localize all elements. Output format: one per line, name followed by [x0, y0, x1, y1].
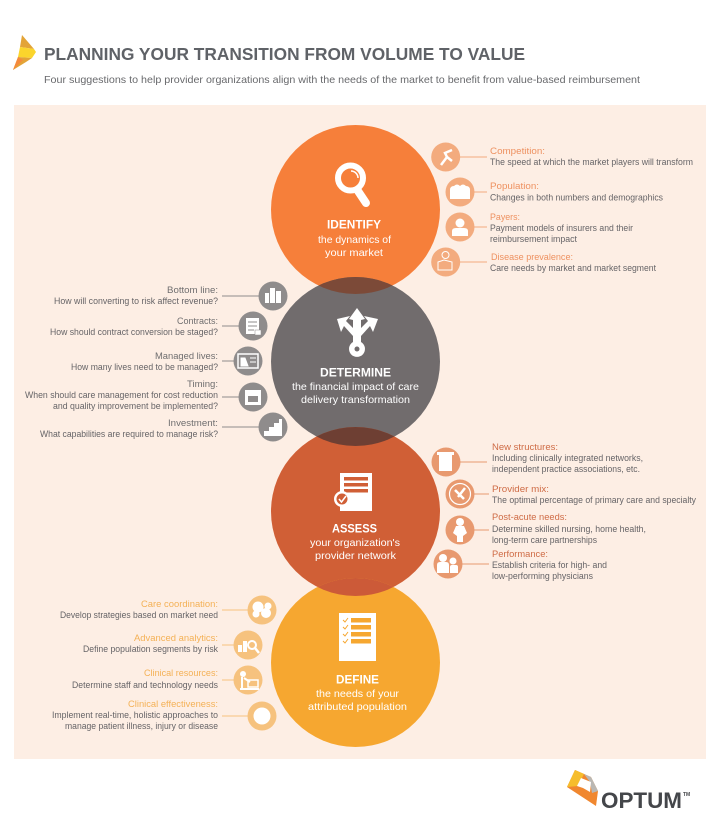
circle: determine — [271, 277, 440, 446]
text: define description — [308, 689, 407, 713]
item: care coordination — [60, 596, 276, 624]
item: payers: reimbursement impact — [490, 234, 578, 244]
item: provider mix: The optimal percentage of primary care and specialty — [492, 495, 697, 505]
item: timing: When should care management for cost reduction — [25, 390, 218, 400]
item: advanced analytics — [83, 630, 262, 660]
item: managed lives — [71, 346, 262, 376]
logo: optum — [567, 770, 690, 813]
item: clinical resources: Clinical resources: — [144, 668, 218, 678]
item: performance — [434, 549, 607, 581]
item: timing: Timing: — [187, 379, 218, 389]
item: population — [446, 178, 664, 206]
circle: assess — [271, 427, 440, 596]
item: clinical effectiveness: Clinical effectiveness: — [128, 699, 218, 709]
text: determine description: delivery transformation — [301, 395, 410, 406]
item: managed lives: Managed lives: — [155, 351, 218, 361]
item: provider mix: Provider mix: — [492, 484, 549, 494]
item: contracts: Contracts: — [177, 316, 218, 326]
item: timing — [25, 379, 268, 412]
text: identify description — [318, 235, 391, 259]
overlap: assess and define — [318, 578, 393, 596]
heading: assess: ASSESS — [332, 522, 377, 536]
text: identify description: your market — [325, 248, 383, 259]
item: investment: What capabilities are required to manage risk? — [40, 429, 218, 439]
item: provider mix — [446, 480, 697, 508]
item: bottom line: How will converting to risk affect revenue? — [54, 296, 218, 306]
item: investment — [40, 412, 288, 442]
item: advanced analytics: Define population segments by risk — [83, 644, 219, 654]
brand mark: top left — [13, 35, 36, 70]
icon: checklist — [339, 613, 376, 661]
item: competition: The speed at which the market players will transform — [490, 157, 693, 167]
item: clinical effectiveness: manage patient illness, injury or disease — [65, 721, 218, 731]
item: payers: Payers: — [490, 212, 520, 222]
item: clinical effectiveness — [52, 699, 276, 731]
item: performance: Performance: — [492, 549, 548, 559]
item: investment: Investment: — [168, 418, 218, 428]
item: new structures: Including clinically integrated networks, — [492, 453, 643, 463]
text: assess description: your organization's — [310, 538, 400, 549]
heading: define: DEFINE — [336, 672, 379, 686]
item: disease prevalence: Disease prevalence: — [491, 252, 573, 262]
item: clinical resources — [72, 666, 262, 694]
item: post-acute needs: long-term care partnerships — [492, 535, 598, 545]
item: clinical effectiveness: Implement real-time, holistic approaches to — [52, 710, 218, 720]
item: clinical resources: Determine staff and technology needs — [72, 680, 219, 690]
item: disease prevalence: Care needs by market and market segment — [490, 263, 657, 273]
overlap: determine and assess — [316, 427, 394, 446]
item: new structures: New structures: — [492, 442, 558, 452]
text: determine description — [292, 382, 419, 406]
item: timing: and quality improvement be implemented? — [53, 401, 218, 411]
item: new structures — [432, 442, 643, 476]
item: advanced analytics: Advanced analytics: — [134, 633, 218, 643]
text: identify description: the dynamics of — [318, 235, 391, 246]
text: define description: the needs of your — [316, 689, 400, 700]
heading: determine: DETERMINE — [320, 366, 391, 380]
item: contracts: How should contract conversion be staged? — [50, 327, 218, 337]
item: performance: low-performing physicians — [492, 571, 594, 581]
item: post-acute needs — [446, 512, 646, 545]
panel: background — [14, 105, 706, 759]
heading: identify: IDENTIFY — [327, 218, 381, 232]
item: contracts — [50, 312, 268, 340]
item: competition: Competition: — [490, 146, 545, 156]
subtitle: Four suggestions to help provider organizations align with the needs of the market to benefit from value-based reimbursement — [44, 75, 640, 86]
item: post-acute needs: Determine skilled nursing, home health, — [492, 524, 646, 534]
item: payers: Payment models of insurers and their — [490, 223, 633, 233]
item: new structures: independent practice associations, etc. — [492, 464, 640, 474]
text: assess description: provider network — [315, 551, 397, 562]
logo: optum: OPTUM — [601, 788, 682, 813]
item: payers — [446, 212, 633, 244]
overlap: identify and determine — [318, 277, 392, 294]
circle: identify — [271, 125, 440, 294]
text: assess description — [310, 538, 400, 562]
item: bottom line — [54, 282, 288, 310]
icon: magnifying glass — [338, 166, 366, 203]
item: competition — [431, 142, 693, 172]
text: determine description: the financial impact of care — [292, 382, 419, 393]
item: care coordination: Develop strategies based on market need — [60, 610, 218, 620]
item: care coordination: Care coordination: — [141, 599, 218, 609]
item: performance: Establish criteria for high- and — [492, 560, 607, 570]
item: post-acute needs: Post-acute needs: — [492, 512, 567, 522]
title: PLANNING YOUR TRANSITION FROM VOLUME TO VALUE — [44, 44, 525, 64]
icon: branching arrows — [337, 308, 378, 357]
icon: document with check — [334, 473, 372, 511]
item: managed lives: How many lives need to be managed? — [71, 362, 218, 372]
item: population: Population: — [490, 181, 539, 191]
item: population: Changes in both numbers and demographics — [490, 192, 664, 202]
circle: define — [271, 578, 440, 747]
item: bottom line: Bottom line: — [167, 285, 218, 295]
text: define description: attributed population — [308, 702, 407, 713]
item: disease prevalence — [431, 248, 657, 276]
logo: optum: TM — [683, 792, 690, 798]
